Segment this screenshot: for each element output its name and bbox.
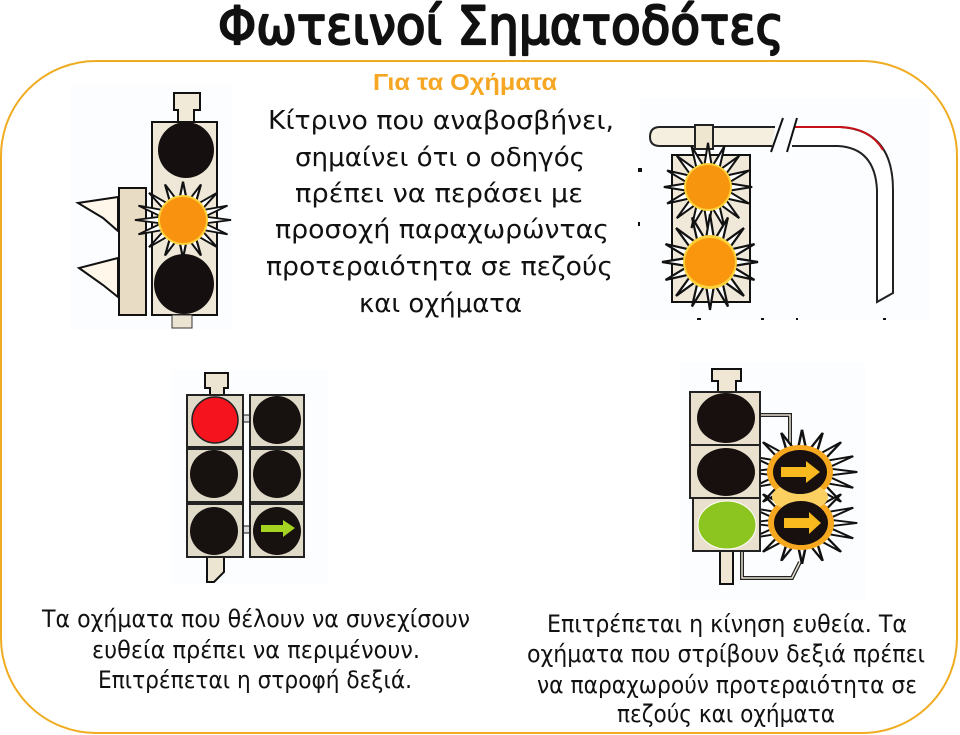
connecting pipes — [742, 415, 800, 578]
head — [152, 122, 217, 315]
caption: red with right arrow: ευθεία πρέπει να περιμένουν. — [92, 636, 420, 664]
caption: green with flashing arrows: πεζούς και οχήματα — [617, 700, 835, 728]
text block: flashing yellow: Κίτρινο που αναβοσβήνει, — [268, 106, 614, 136]
traffic light: flashing yellow with side plate — [70, 85, 232, 330]
heading: for vehicles: Για τα Οχήματα — [373, 69, 557, 95]
text block: flashing yellow: και οχήματα — [359, 289, 522, 319]
caption: green with flashing arrows: οχήματα που στρίβουν δεξιά πρέπει — [527, 640, 925, 668]
text block: flashing yellow: προτεραιότητα σε πεζούς — [266, 252, 613, 282]
housings — [187, 395, 304, 557]
caption: red with right arrow: Επιτρέπεται η στροφή δεξιά. — [98, 666, 412, 694]
lower sun — [662, 214, 758, 310]
housing — [690, 392, 760, 551]
red light — [192, 397, 238, 443]
traffic light: green with flashing right arrows — [680, 362, 865, 600]
flashing arrow lights — [747, 430, 857, 564]
caption: red with right arrow: Τα οχήματα που θέλουν να συνεχίσουν — [41, 605, 470, 633]
cap — [174, 93, 200, 122]
flashing sun — [135, 182, 231, 258]
cap and pole — [712, 369, 741, 392]
upper sun — [664, 143, 752, 231]
caption: green with flashing arrows: να παραχωρούν προτεραιότητα σε — [537, 671, 917, 699]
overhead arm — [650, 125, 893, 302]
caption: red with right arrow — [41, 605, 470, 694]
text block: flashing yellow — [266, 106, 614, 319]
cap and pole — [205, 373, 228, 395]
traffic light: red with green right arrow — [172, 370, 328, 584]
green light — [698, 501, 756, 549]
text block: flashing yellow: σημαίνει ότι ο οδηγός — [295, 143, 585, 173]
text block: flashing yellow: προσοχή παραχωρώντας — [275, 215, 609, 245]
side plate and visors — [78, 188, 146, 315]
text block: flashing yellow: πρέπει να περάσει με — [295, 179, 583, 209]
green arrow — [261, 520, 295, 537]
caption: green with flashing arrows: Επιτρέπεται η κίνηση ευθεία. Τα — [547, 610, 907, 638]
traffic light: two flashing with overhead arm — [638, 98, 930, 320]
head — [672, 155, 750, 302]
caption: green with flashing arrows — [527, 610, 925, 728]
